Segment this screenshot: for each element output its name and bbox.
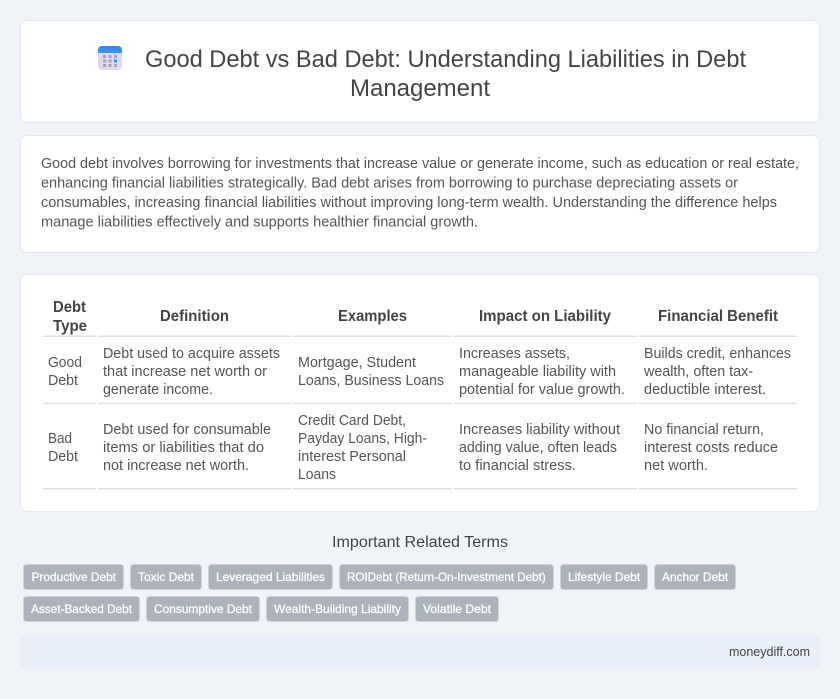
panel: comparison table	[20, 274, 820, 512]
tag: consumptive debt: Consumptive Debt	[154, 602, 253, 616]
table header row: Debt	[53, 299, 87, 316]
panel: intro paragraph	[20, 136, 820, 252]
tag: asset-backed debt: Asset-Backed Debt	[31, 602, 133, 616]
table row: good debt: Debt used to acquire assets	[103, 346, 280, 362]
tag: toxic debt: Toxic Debt	[138, 570, 195, 584]
tag: wealth-building liability: Wealth-Building Liability	[274, 602, 401, 616]
footer	[20, 635, 820, 669]
text block: intro: manage liabilities effectively and supports healthier financial growth.	[41, 214, 478, 230]
heading: important related terms: Important Related Terms	[332, 534, 508, 551]
table header row: Impact on Liability	[479, 308, 611, 325]
table row: bad debt: to financial stress.	[459, 458, 576, 474]
table header row: Examples	[338, 308, 407, 325]
text block: intro: enhancing financial liabilities strategically. Bad debt arises from borrowing to purchase depreciating assets or	[41, 176, 738, 192]
table row: good debt: deductible interest.	[644, 382, 766, 398]
table row: good debt: Good	[48, 355, 82, 371]
table row: good debt: Mortgage, Student	[298, 355, 416, 371]
tag: wealth-building liability	[266, 596, 408, 622]
table row: good debt: Loans, Business Loans	[298, 373, 444, 389]
title	[145, 46, 746, 102]
footer: moneydiff.com	[729, 644, 810, 659]
table row: bad debt: interest Personal	[298, 449, 406, 465]
table row: bad debt: interest costs reduce	[644, 440, 778, 456]
tag: leveraged liabilities	[208, 564, 332, 590]
tag: lifestyle debt: Lifestyle Debt	[568, 570, 641, 584]
table row: good debt: that increase net worth or	[103, 364, 267, 380]
tag: anchor debt	[654, 564, 736, 590]
title: Good Debt vs Bad Debt: Understanding Liabilities in Debt	[145, 46, 746, 73]
text block: intro: Good debt involves borrowing for investments that increase value or generate income, such as education or real estate,	[41, 156, 799, 172]
tag: productive debt	[24, 564, 124, 590]
table row: bad debt: Payday Loans, High-	[298, 431, 427, 447]
tag: toxic debt	[130, 564, 202, 590]
table row: good debt: Increases assets,	[459, 346, 570, 362]
tag: lifestyle debt	[560, 564, 648, 590]
table row: good debt	[48, 346, 791, 398]
table row: bad debt: Credit Card Debt,	[298, 413, 406, 429]
table header row: Financial Benefit	[658, 308, 779, 325]
table row: bad debt: Loans	[298, 467, 336, 483]
tag: asset-backed debt	[24, 596, 140, 622]
title: Management	[350, 75, 490, 102]
table row: good debt: generate income.	[103, 382, 213, 398]
table row: bad debt: Increases liability without	[459, 422, 620, 438]
table row: good debt: manageable liability with	[459, 364, 616, 380]
tag: roidebt: ROIDebt (Return-On-Investment Debt)	[347, 570, 546, 584]
icon: calendar	[98, 46, 122, 70]
tag: roidebt	[340, 564, 554, 590]
table header row: Type	[53, 318, 87, 335]
table row: bad debt: Debt used for consumable	[103, 422, 271, 438]
table row: bad debt	[48, 413, 778, 483]
table row: bad debt: No financial return,	[644, 422, 764, 438]
table row: bad debt: Bad	[48, 431, 72, 447]
tag: consumptive debt	[146, 596, 260, 622]
tag: volatile debt	[416, 596, 498, 622]
table header row	[53, 299, 779, 335]
text block: intro	[41, 156, 799, 230]
table row: good debt: Debt	[48, 373, 78, 389]
tags: related terms	[24, 564, 736, 622]
table row: bad debt: Debt	[48, 449, 78, 465]
table header row: Definition	[160, 308, 229, 325]
table row: good debt: wealth, often tax-	[643, 364, 753, 380]
table row: bad debt: not increase net worth.	[103, 458, 249, 474]
tag: productive debt: Productive Debt	[32, 570, 117, 584]
panel: header	[20, 20, 820, 122]
text block: intro: consumables, increasing financial liabilities without improving long-term wealth. Understanding the difference helps	[41, 195, 777, 211]
table row: bad debt: adding value, often leads	[459, 440, 617, 456]
table row: bad debt: net worth.	[644, 458, 708, 474]
tag: anchor debt: Anchor Debt	[662, 570, 729, 584]
table row: good debt: Builds credit, enhances	[644, 346, 791, 362]
table row: good debt: potential for value growth.	[459, 382, 625, 398]
tag: volatile debt: Volatile Debt	[423, 602, 492, 616]
tag: leveraged liabilities: Leveraged Liabilities	[216, 570, 325, 584]
table row: bad debt: items or liabilities that do	[103, 440, 264, 456]
